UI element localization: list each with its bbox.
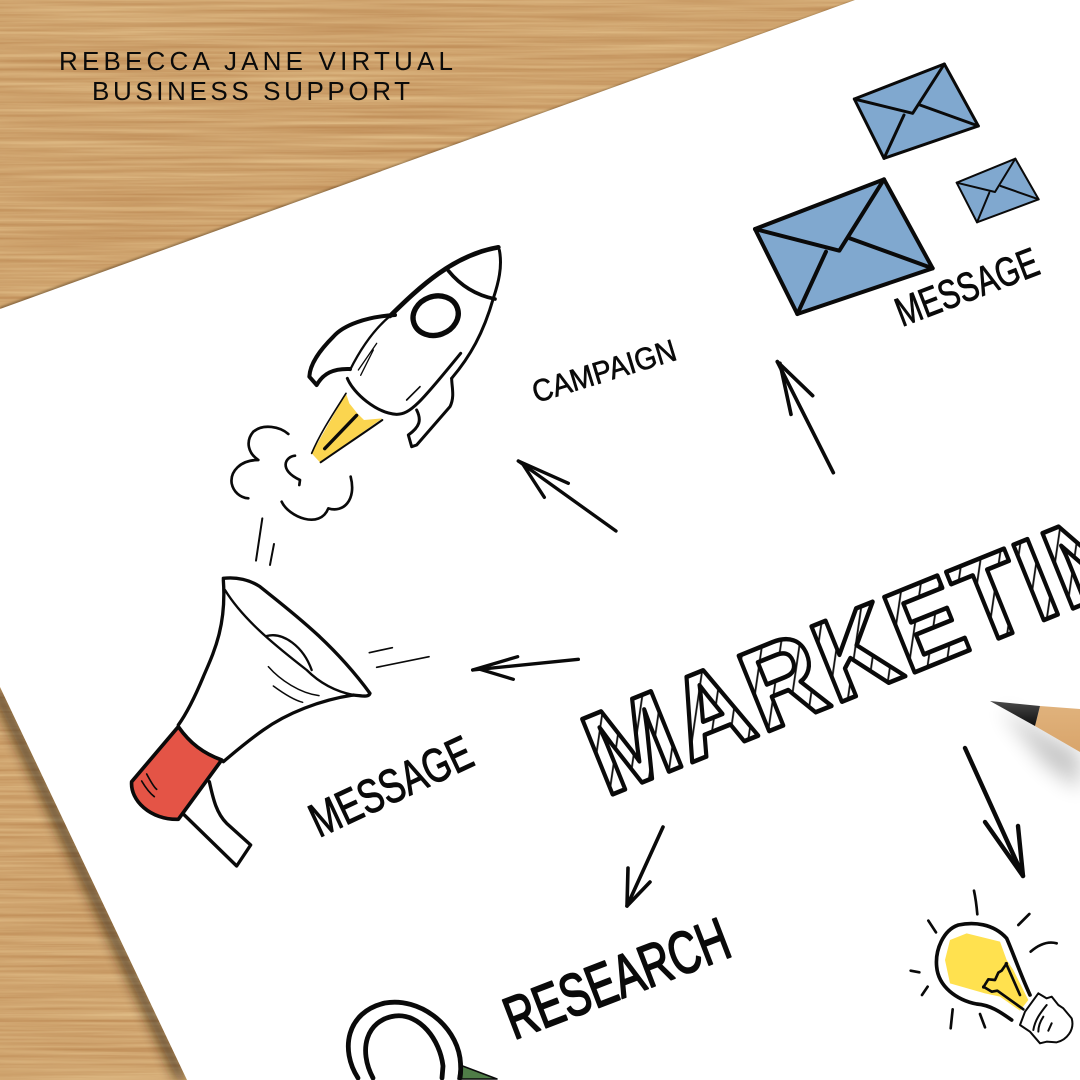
icon: pencil bbox=[990, 701, 1080, 790]
rocket flame bbox=[312, 393, 382, 462]
label: research: RESEARCH bbox=[495, 905, 739, 1052]
pencil wood body bbox=[1035, 706, 1080, 752]
medium envelope bbox=[854, 64, 978, 158]
bulb filament bbox=[983, 963, 1023, 1009]
arrow: to envelopes bbox=[777, 362, 833, 473]
icon: megaphone bbox=[132, 578, 429, 866]
rocket body bbox=[309, 247, 501, 447]
arrow: to research bbox=[627, 827, 663, 906]
magnifier lens bbox=[348, 1002, 461, 1078]
arrow: to megaphone bbox=[473, 657, 578, 679]
pencil shadow bbox=[1000, 708, 1080, 790]
magnifier handle bbox=[458, 1065, 497, 1079]
label: message left: MESSAGE bbox=[301, 726, 481, 848]
paper shadow on table bbox=[0, 0, 855, 1080]
megaphone red band bbox=[132, 727, 222, 819]
bulb outline bbox=[936, 924, 1030, 1020]
icon: envelopes bbox=[755, 64, 1039, 314]
arrow: to light bulb bbox=[965, 748, 1023, 876]
small envelope bbox=[957, 159, 1039, 222]
title: REBECCA JANE VIRTUAL bbox=[59, 46, 453, 76]
smoke cloud bbox=[231, 427, 352, 565]
arrow: to rocket bbox=[518, 461, 616, 531]
bulb rays bbox=[911, 891, 1057, 1028]
label: campaign: CAMPAIGN bbox=[528, 333, 681, 410]
title: BUSINESS SUPPORT bbox=[92, 76, 410, 106]
bulb yellow fill bbox=[945, 933, 1028, 1011]
bulb screw base bbox=[1020, 993, 1072, 1043]
megaphone horn bbox=[178, 578, 370, 762]
icon: magnifying glass bbox=[348, 1002, 497, 1079]
megaphone handle bbox=[183, 782, 251, 866]
pencil lead bbox=[990, 701, 1040, 726]
title bbox=[59, 46, 453, 106]
icon: rocket with smoke bbox=[231, 247, 501, 565]
sound lines bbox=[369, 648, 429, 667]
large envelope bbox=[755, 179, 933, 314]
icon: light bulb bbox=[911, 891, 1072, 1043]
